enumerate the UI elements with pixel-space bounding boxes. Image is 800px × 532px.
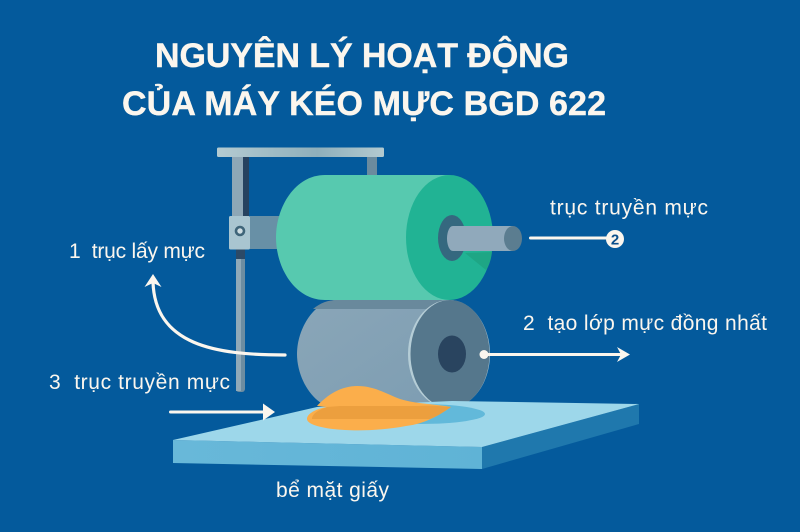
label: paper surface: bể mặt giấy (276, 479, 390, 502)
ink shadow (355, 404, 485, 424)
arrow: right from lower roller (480, 347, 630, 362)
machine frame (217, 148, 384, 392)
title (122, 36, 606, 123)
upper green roller (276, 175, 522, 300)
title: CỦA MÁY KÉO MỰC BGD 622 (122, 85, 606, 123)
label: step 3: 3 trục truyền mực (49, 371, 230, 394)
arrow: right to paper (169, 404, 275, 420)
arrow: curved up to step 1 (144, 274, 285, 355)
callout: transfer roller label (529, 196, 708, 248)
orange ink puddle (307, 386, 451, 430)
label: step 2: 2 tạo lớp mực đồng nhất (523, 312, 767, 335)
callout: transfer roller label: trục truyền mực (550, 196, 708, 220)
title: NGUYÊN LÝ HOẠT ĐỘNG (155, 36, 569, 75)
lower gray roller (297, 300, 490, 408)
callout: transfer roller label: 2 (611, 232, 619, 248)
paper surface (173, 401, 639, 469)
label: step 1: 1 trục lấy mực (69, 240, 205, 263)
